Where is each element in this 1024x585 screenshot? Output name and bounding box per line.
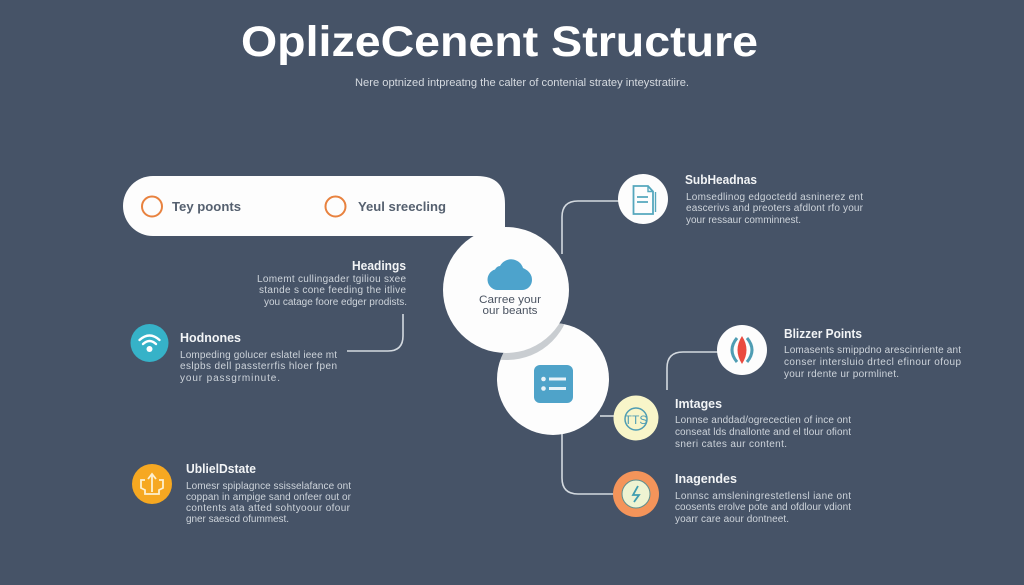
icon: orange ring one: [142, 196, 162, 216]
text block: hodnones: your passgrminute.: [180, 373, 280, 384]
text block: ublieldstate: contents ata atted sohtyoour ofour: [186, 503, 351, 514]
panel: lower hub circle: [497, 323, 609, 435]
icon: cloud: [488, 259, 532, 290]
text block: subheadnas: Lomsedlinog edgoctedd asninerez ent: [686, 192, 863, 203]
text block: imtages: conseat lds dnallonte and el tlour ofiont: [675, 427, 851, 438]
pill label two: Yeul sreecling: [358, 199, 446, 214]
text block: imtages: [675, 397, 851, 450]
text block: imtages: sneri cates aur content.: [675, 439, 787, 450]
icon: document: [618, 174, 668, 224]
text block: ublieldstate: UblielDstate: [186, 462, 256, 476]
text block: hodnones: [180, 331, 337, 384]
text block: headings: you catage foore edger prodists.: [264, 297, 407, 308]
text block: inagendes: coosents erolve pote and ofdlour vdiont: [675, 502, 851, 513]
text block: ublieldstate: coppan in ampige sand onfeer out or: [186, 492, 352, 503]
icon: bizzer: [717, 325, 767, 375]
icon: inagendes: [613, 471, 659, 517]
icon: update: [132, 464, 172, 504]
subtitle: Nere optnized intpreatng the calter of contenial stratey inteystratiire.: [355, 77, 689, 89]
text block: bizzer points: [784, 327, 961, 380]
title: OplizeCenent Structure: [241, 18, 758, 66]
text block: ublieldstate: [186, 462, 352, 525]
panel: main hub circle: [443, 227, 569, 353]
icon: list: [534, 365, 573, 403]
text block: headings: [257, 259, 407, 308]
text block: inagendes: yoarr care aour dontneet.: [675, 514, 789, 525]
text block: headings: stande s cone feeding the itlive: [259, 285, 406, 296]
text block: ublieldstate: Lomesr spiplagnce ssisselafance ont: [186, 481, 351, 492]
pill label one: Tey poonts: [172, 199, 241, 214]
text block: hodnones: Hodnones: [180, 331, 241, 345]
connector lines: [347, 201, 720, 494]
text block: subheadnas: eascerivs and preoters afdlont rfo your: [686, 203, 864, 214]
text block: bizzer points: Blizzer Points: [784, 327, 862, 341]
hub label: Carree your: [479, 294, 541, 306]
text block: headings: Lomemt cullingader tgiliou sxee: [257, 274, 406, 285]
text block: bizzer points: conser intersluio drtecl efinour ofoup: [784, 357, 961, 368]
icon: images: [614, 396, 658, 440]
text block: hodnones: eslpbs dell passterrfis hloer fpen: [180, 361, 337, 372]
text block: subheadnas: your ressaur comminnest.: [686, 215, 801, 226]
panel: main hub circle: our beants: [482, 305, 538, 317]
text block: inagendes: [675, 472, 851, 525]
text block: subheadnas: [685, 173, 864, 226]
text block: imtages: Imtages: [675, 397, 722, 411]
text block: headings: Headings: [352, 259, 406, 273]
panel: top pill: [123, 176, 505, 236]
text block: ublieldstate: gner saescd ofummest.: [186, 514, 289, 525]
text block: bizzer points: your rdente ur pormlinet.: [784, 369, 899, 380]
text block: subheadnas: SubHeadnas: [685, 173, 757, 187]
text block: inagendes: Lonnsc amsleningrestetlensl iane ont: [675, 491, 851, 502]
text block: hodnones: Lompeding golucer eslatel ieee mt: [180, 350, 337, 361]
icon: images: TTS: [625, 413, 647, 427]
icon: orange ring two: [326, 196, 346, 216]
text block: bizzer points: Lomasents smippdno arescinriente ant: [784, 345, 961, 356]
icon: wifi: [130, 324, 168, 362]
text block: imtages: Lonnse anddad/ogrecectien of ince ont: [675, 415, 851, 426]
text block: inagendes: Inagendes: [675, 472, 737, 486]
